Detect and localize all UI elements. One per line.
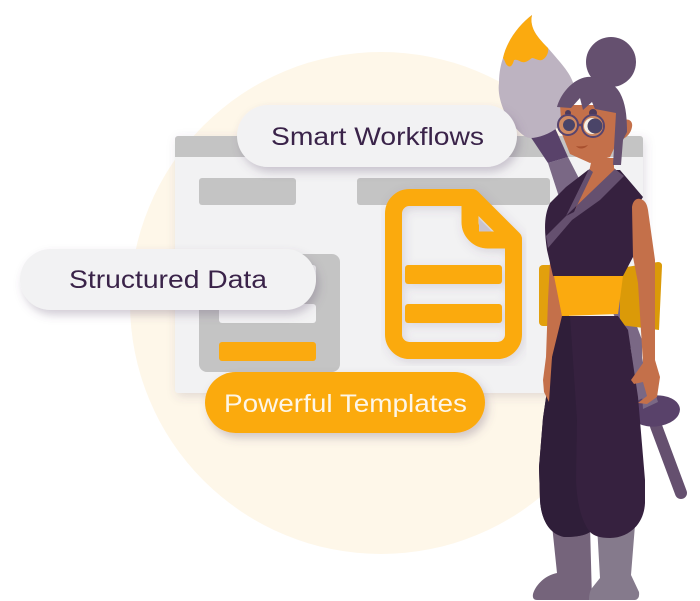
form card bbox=[199, 254, 340, 372]
pill: Powerful Templates: Powerful Templates bbox=[224, 390, 467, 418]
giant paintbrush bbox=[499, 15, 642, 360]
character hair bbox=[557, 77, 627, 165]
character right arm bbox=[631, 199, 660, 404]
app window bbox=[175, 136, 643, 393]
paint on bristles bbox=[503, 15, 548, 67]
character hair bun bbox=[586, 37, 636, 87]
icon: document bbox=[394, 197, 514, 350]
character collar bbox=[546, 169, 624, 248]
background circle bbox=[130, 52, 632, 554]
character torso bbox=[545, 170, 643, 276]
pill: Smart Workflows bbox=[237, 105, 517, 167]
sword scabbard bbox=[628, 326, 681, 493]
character boots bbox=[533, 525, 639, 600]
waist bag bbox=[539, 262, 662, 330]
character neck and chest bbox=[574, 158, 618, 213]
pill: Powerful Templates bbox=[205, 372, 485, 433]
character bbox=[533, 37, 660, 600]
character glasses bbox=[558, 109, 604, 137]
left header bar bbox=[199, 178, 296, 205]
character face bbox=[560, 105, 620, 163]
pill: Structured Data bbox=[20, 249, 316, 310]
character sash bbox=[554, 276, 623, 316]
right header bar bbox=[357, 178, 550, 205]
brush handle bbox=[548, 157, 642, 360]
character lips bbox=[576, 145, 588, 149]
brush bristles bbox=[499, 15, 575, 138]
character trousers bbox=[539, 316, 645, 538]
pill: Structured Data: Structured Data bbox=[69, 266, 267, 294]
pill: Smart Workflows: Smart Workflows bbox=[271, 123, 484, 151]
character ear bbox=[623, 119, 632, 139]
window title bar bbox=[175, 136, 643, 157]
character left arm bbox=[543, 262, 562, 402]
